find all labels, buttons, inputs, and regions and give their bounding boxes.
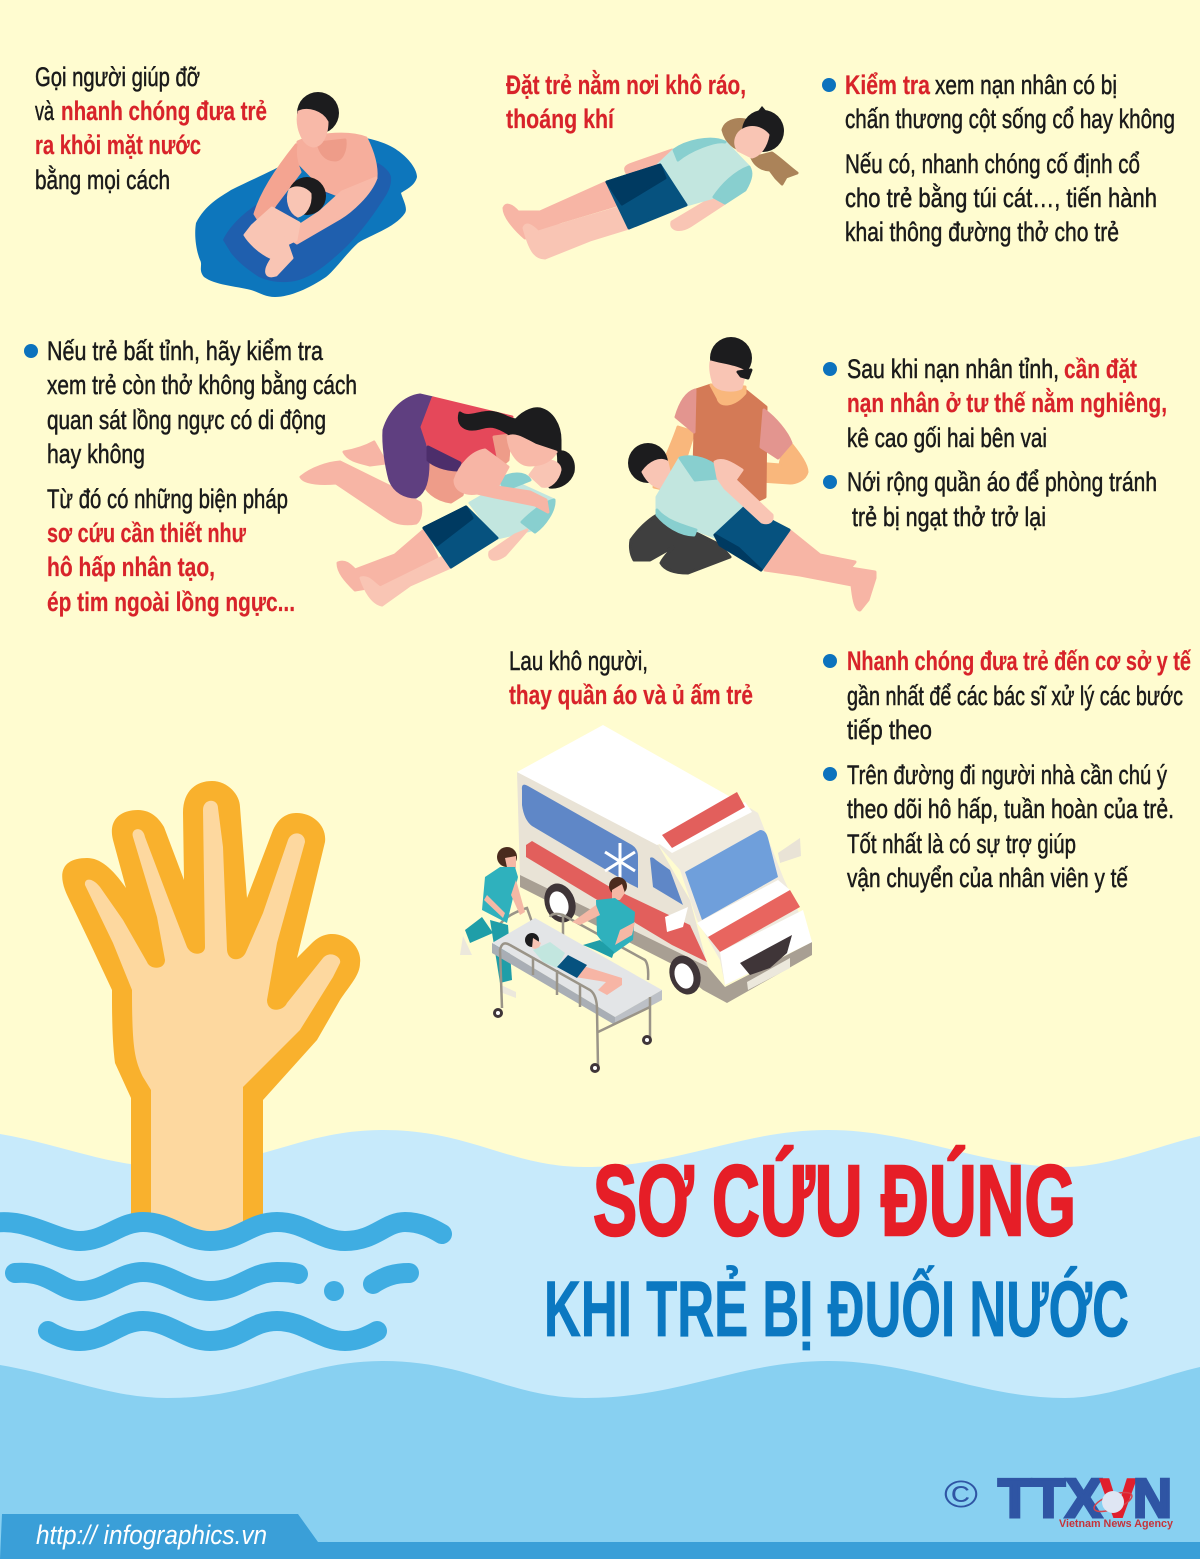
step 5 text: cần đặt (1064, 354, 1137, 384)
step 2 text: thoáng khí (506, 104, 615, 134)
step 4 illustration: checking breathing (301, 395, 573, 605)
step 1 illustration: rescue from water (195, 92, 417, 297)
logo: TTXVN: N (1133, 1467, 1172, 1529)
water: wave lines (0, 1222, 442, 1341)
step 6 text: thay quần áo và ủ ấm trẻ (509, 680, 753, 710)
illustration: drowning hand (62, 781, 360, 1232)
step 1 text (35, 62, 267, 195)
step 2 text (506, 69, 746, 134)
step 4 text: sơ cứu cần thiết như (47, 518, 246, 548)
step 1 text: ra khỏi mặt nước (35, 130, 201, 160)
patient (525, 933, 622, 995)
step 1 text: và (35, 96, 55, 126)
step 4 text: hô hấp nhân tạo, (47, 552, 215, 582)
step 5 text (823, 354, 1167, 532)
step 3 text: khai thông đường thở cho trẻ (845, 217, 1119, 247)
step 1 text: bằng mọi cách (35, 164, 170, 195)
footer band (0, 1514, 1200, 1559)
step 5 text: kê cao gối hai bên vai (847, 423, 1047, 453)
step 5 illustration: recovery position (628, 337, 875, 610)
step 4 text: hay không (47, 439, 145, 469)
star of life (605, 843, 635, 880)
step 5 text: trẻ bị ngạt thở trở lại (852, 502, 1046, 532)
step 4 text (24, 336, 357, 617)
step 4 text: ép tim ngoài lồng ngực... (47, 587, 295, 617)
footer url: http:// infographics.vn (36, 1520, 267, 1550)
title (544, 1145, 1129, 1353)
step 6 text (509, 646, 753, 710)
step 6 text: Lau khô người, (509, 646, 648, 676)
step 3 text (822, 70, 1175, 247)
step 7 text (823, 646, 1192, 893)
step 3 text: Kiểm tra (845, 70, 931, 100)
step 4 text: xem trẻ còn thở không bằng cách (47, 369, 357, 400)
step 4 text: Nếu trẻ bất tỉnh, hãy kiểm tra (47, 336, 324, 366)
logo: TTXVN: © (944, 1474, 978, 1516)
step 4 text: Từ đó có những biện pháp (47, 484, 288, 514)
step 1 text: nhanh chóng đưa trẻ (61, 96, 267, 126)
step 2 illustration: child lying down (504, 106, 797, 258)
stretcher rear rail (498, 908, 648, 980)
step 2 text: Đặt trẻ nằm nơi khô ráo, (506, 69, 746, 100)
step 5 text: Sau khi nạn nhân tỉnh, (847, 354, 1059, 384)
illustration: ambulance with stretcher (460, 725, 812, 1073)
nurses (460, 847, 635, 998)
ambulance body (517, 725, 812, 1003)
water: light layer (0, 1130, 1200, 1559)
step 4 text: quan sát lồng ngực có di động (47, 405, 326, 435)
ambulance wheels (539, 879, 706, 999)
step 7 text: tiếp theo (847, 715, 932, 745)
step 7 text: Tốt nhất là có sự trợ giúp (847, 829, 1076, 859)
logo: TTXVN (944, 1467, 1174, 1530)
stretcher (492, 918, 662, 1073)
water: mid layer (0, 1361, 1200, 1559)
logo: TTXVN: TTX (998, 1467, 1102, 1529)
logo: TTXVN: V (1100, 1467, 1136, 1529)
step 3 text: xem nạn nhân có bị (935, 70, 1117, 100)
logo: TTXVN: Vietnam News Agency (1059, 1518, 1174, 1530)
step 1 text: Gọi người giúp đỡ (35, 62, 200, 92)
